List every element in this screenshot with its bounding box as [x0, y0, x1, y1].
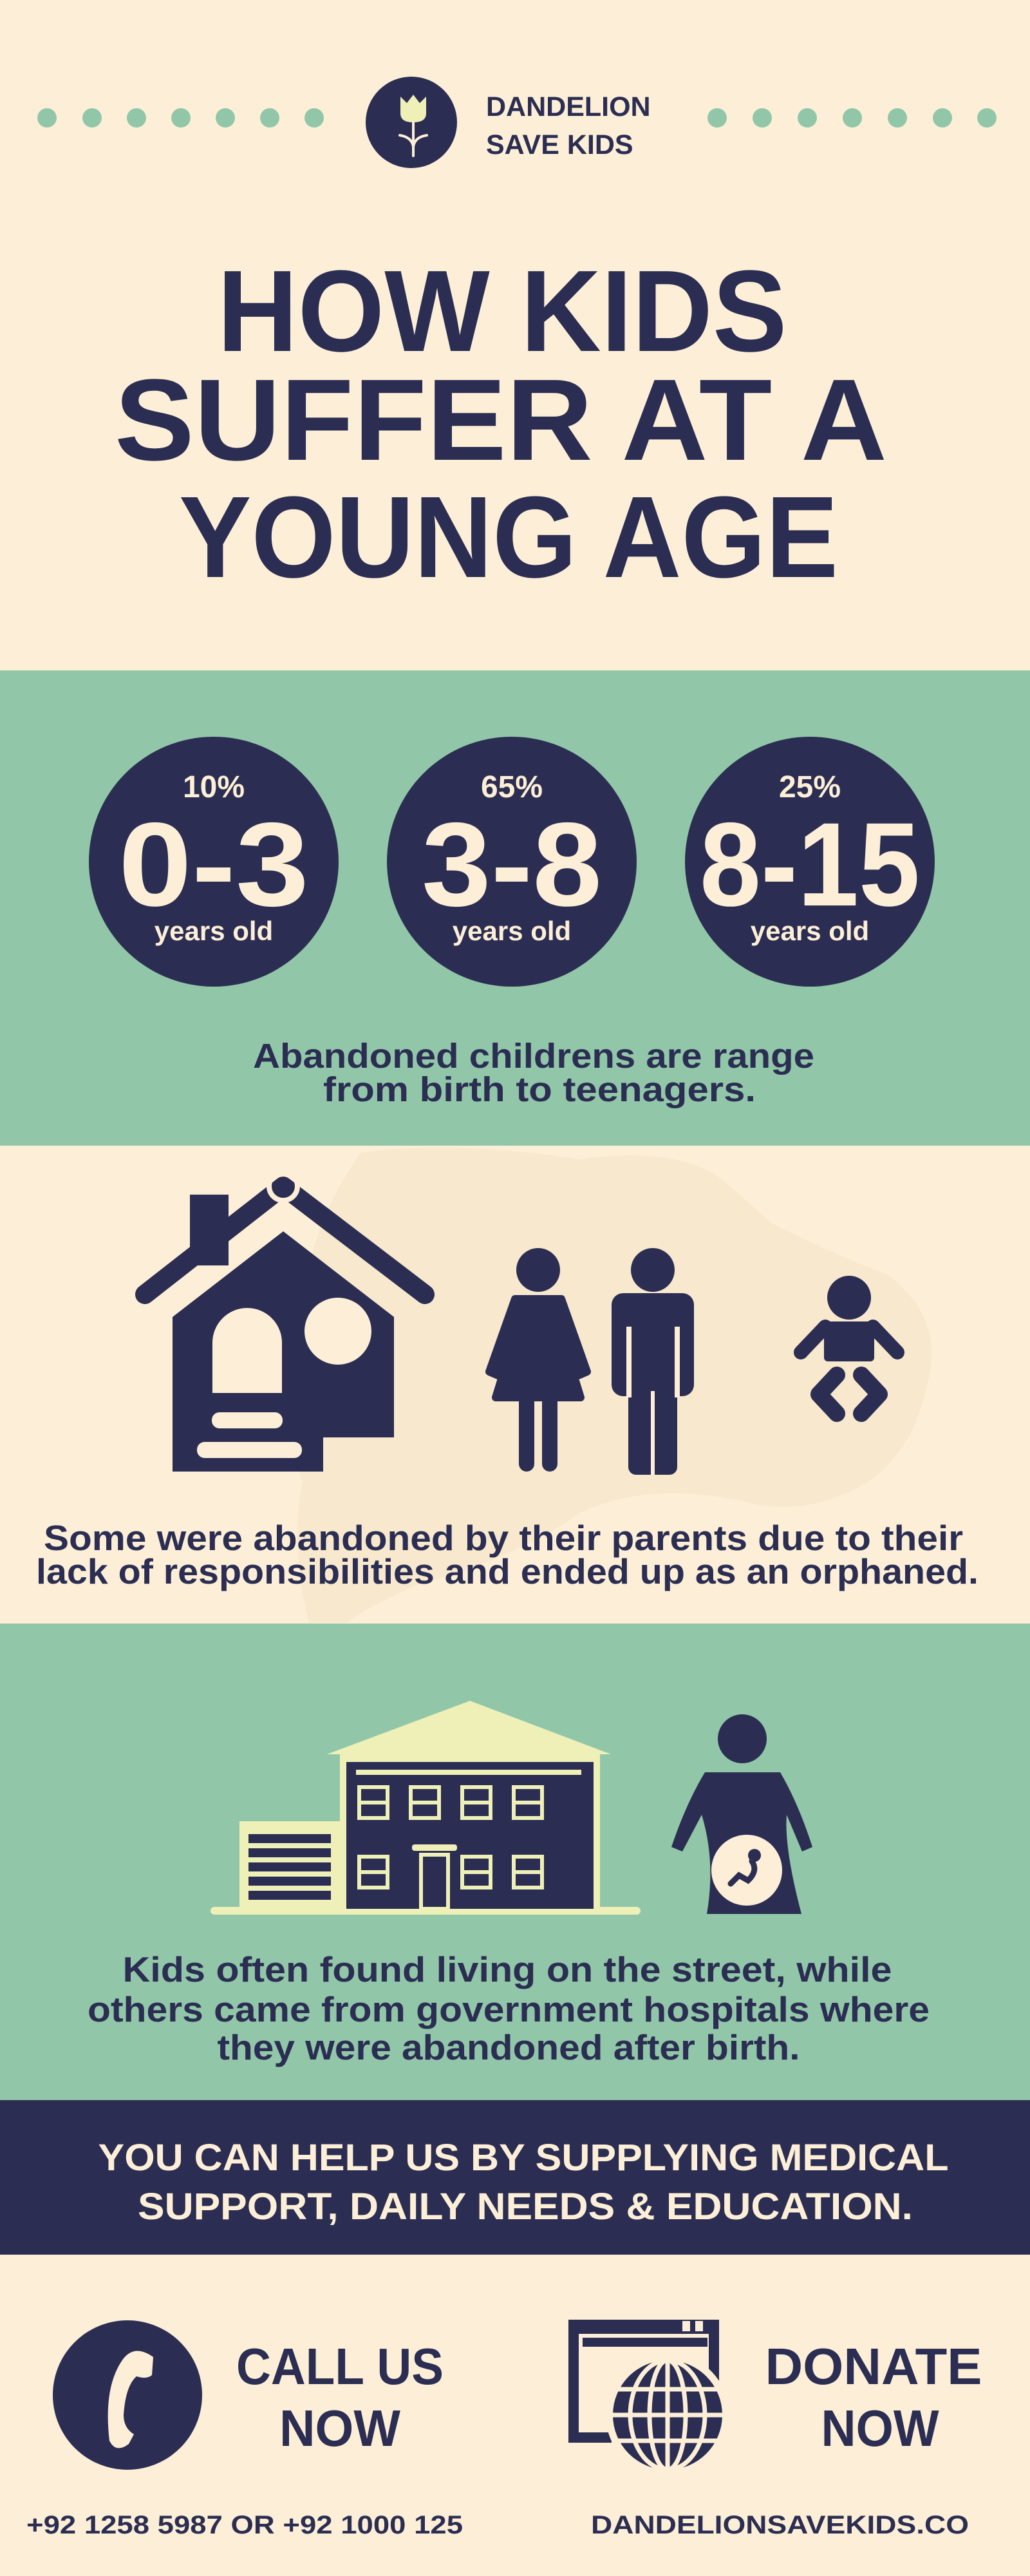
panel: age ranges [0, 670, 1030, 1146]
icon: house [145, 1172, 425, 1472]
text: age range caption: from birth to teenagers. [323, 1070, 756, 1109]
text: age range caption: Abandoned childrens are range [253, 1037, 814, 1075]
panel: abandoned by parents [0, 1146, 1030, 1624]
text: donate now: DONATE [765, 2338, 982, 2395]
icon: woman [489, 1248, 587, 1472]
banner: call to action [0, 2100, 1030, 2255]
icon: building [211, 1701, 641, 1915]
title [115, 247, 887, 602]
brand name: DANDELION [486, 91, 651, 122]
text: call us now: CALL US [236, 2338, 444, 2395]
circle: 8-15: years old [751, 916, 869, 946]
title: SUFFER AT A [115, 355, 887, 485]
text: website: DANDELIONSAVEKIDS.CO [591, 2511, 969, 2539]
circle: 0-3: 10% [183, 770, 245, 804]
circle: 0-3: 0-3 [118, 799, 309, 931]
banner: call to action: YOU CAN HELP US BY SUPPLYING MEDICAL [98, 2137, 949, 2179]
dots left [37, 108, 324, 128]
header: logo and dots [37, 77, 997, 168]
circle: 3-8: 65% [481, 770, 543, 804]
title: YOUNG AGE [179, 473, 838, 602]
circle: 0-3: years old [154, 916, 273, 946]
icon: pregnant woman [671, 1714, 812, 1914]
icon: man [612, 1248, 694, 1475]
panel: street and hospitals [0, 1624, 1030, 2100]
brand name: SAVE KIDS [486, 129, 633, 160]
circle: 8-15: 25% [779, 770, 841, 804]
text: parents caption: Some were abandoned by their parents due to their [44, 1518, 963, 1558]
title: HOW KIDS [218, 247, 787, 376]
circle: 3-8 [387, 737, 637, 987]
circle: 0-3 [89, 737, 339, 987]
text: hospital caption: others came from government hospitals where [88, 1989, 930, 2029]
banner: call to action: SUPPORT, DAILY NEEDS & EDUCATION. [138, 2186, 913, 2228]
text: age range caption [253, 1037, 814, 1109]
text: hospital caption: Kids often found living on the street, while [122, 1949, 892, 1989]
icon: browser globe [568, 2320, 729, 2477]
text: hospital caption: they were abandoned after birth. [218, 2027, 800, 2067]
dots right [707, 108, 997, 128]
text: parents caption [36, 1518, 979, 1591]
circle: 8-15 [685, 737, 935, 987]
icon: baby [801, 1276, 897, 1414]
circle: 3-8: years old [453, 916, 571, 946]
text: donate now: NOW [821, 2400, 939, 2457]
icon: phone [53, 2320, 202, 2470]
text: hospital caption [88, 1949, 930, 2067]
text: call us now [236, 2338, 444, 2457]
text: call us now: NOW [279, 2400, 400, 2457]
circle: 3-8: 3-8 [422, 799, 602, 931]
text: donate now [765, 2338, 982, 2457]
circle: 8-15: 8-15 [700, 799, 920, 931]
text: parents caption: lack of responsibilities and ended up as an orphaned. [36, 1551, 979, 1591]
text: phone numbers: +92 1258 5987 OR +92 1000 125 [26, 2511, 463, 2539]
brand name [486, 91, 651, 160]
icon: tulip logo [366, 77, 457, 168]
